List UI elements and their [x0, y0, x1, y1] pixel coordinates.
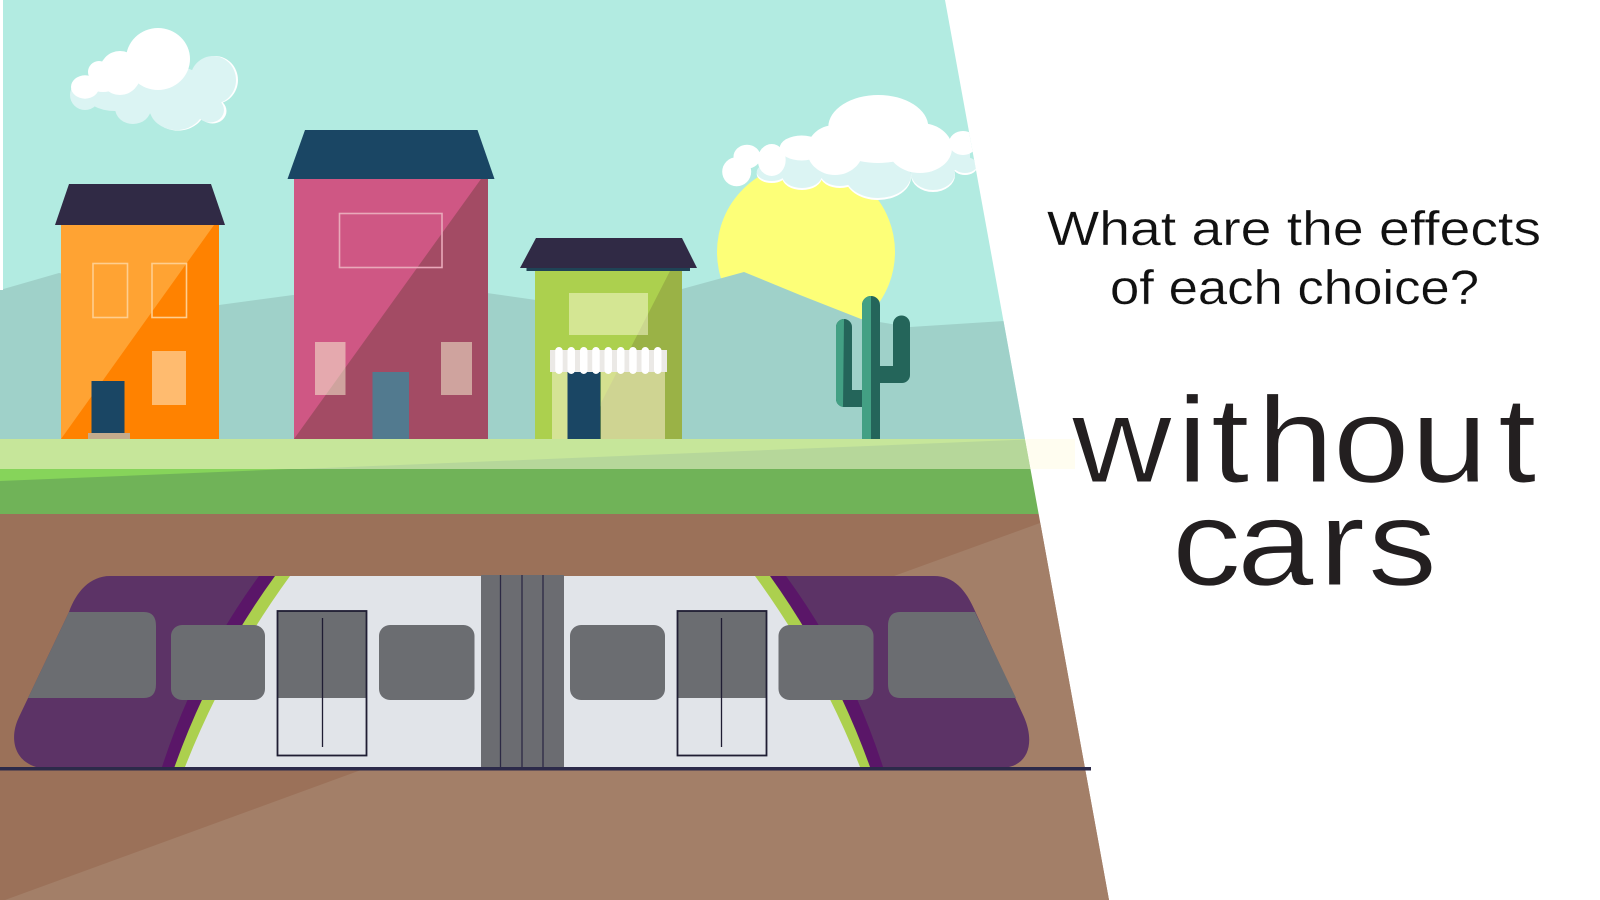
pink upper window: [340, 214, 442, 268]
pink wall: [294, 179, 488, 439]
passenger window 3: [570, 625, 665, 700]
title: without cars: without: [1071, 371, 1536, 508]
livery stripe: purple: [162, 576, 883, 767]
orange wall: [61, 225, 219, 439]
door left: [278, 611, 366, 756]
ground: soil: [0, 514, 1120, 900]
rail: [0, 767, 1091, 770]
shop window highlight: [601, 372, 617, 403]
title: without cars: [1071, 371, 1536, 611]
pink left window: [315, 342, 346, 395]
sky: [3, 0, 1025, 438]
green upper window: [569, 293, 648, 335]
hills: [0, 272, 1030, 445]
orange door step: [88, 433, 130, 439]
awning: [550, 347, 667, 374]
shop window left: [552, 372, 568, 439]
orange door: [92, 381, 124, 433]
heading: question: What are the effects: [1047, 203, 1541, 256]
orange wall highlight: [61, 225, 214, 439]
orange lower window: [152, 351, 186, 405]
orange roof: [55, 184, 225, 225]
cab window right: [888, 612, 1016, 698]
carriage white: [185, 576, 860, 767]
livery stripe: green: [174, 576, 870, 767]
band extension past panel edge: [1025, 439, 1075, 469]
icon: cactus: [836, 296, 910, 439]
cloud: left: [70, 28, 238, 130]
train: [14, 575, 1029, 767]
passenger window 4: [778, 625, 874, 700]
title: without cars: cars: [1172, 474, 1437, 611]
heading: question: [1047, 203, 1541, 315]
green eave: [526, 268, 690, 271]
house: green: [520, 238, 697, 439]
pink roof: [288, 130, 494, 179]
pink door: [372, 372, 409, 439]
orange upper left window: [93, 264, 128, 318]
gangway connector: [481, 575, 564, 767]
passenger window 2: [379, 625, 474, 700]
cab window left: [28, 612, 156, 698]
pink right window: [441, 342, 472, 395]
orange upper right window: [152, 264, 186, 318]
cloud: right: [722, 95, 977, 200]
green wall highlight: [535, 271, 670, 439]
train body: [14, 576, 1029, 767]
green roof: [520, 238, 697, 268]
ground: grass: [0, 439, 1120, 514]
panel: illustrated scene: [0, 0, 1120, 900]
door right: [678, 611, 766, 756]
green wall: [600, 271, 682, 439]
passenger window 1: [171, 625, 265, 700]
house: orange: [55, 184, 225, 439]
house: pink: [288, 130, 494, 439]
heading: question: of each choice?: [1110, 262, 1479, 315]
shop window right: [601, 372, 665, 439]
pink wall highlight: [294, 179, 481, 439]
shop door: [568, 372, 600, 439]
sun: [717, 177, 895, 320]
